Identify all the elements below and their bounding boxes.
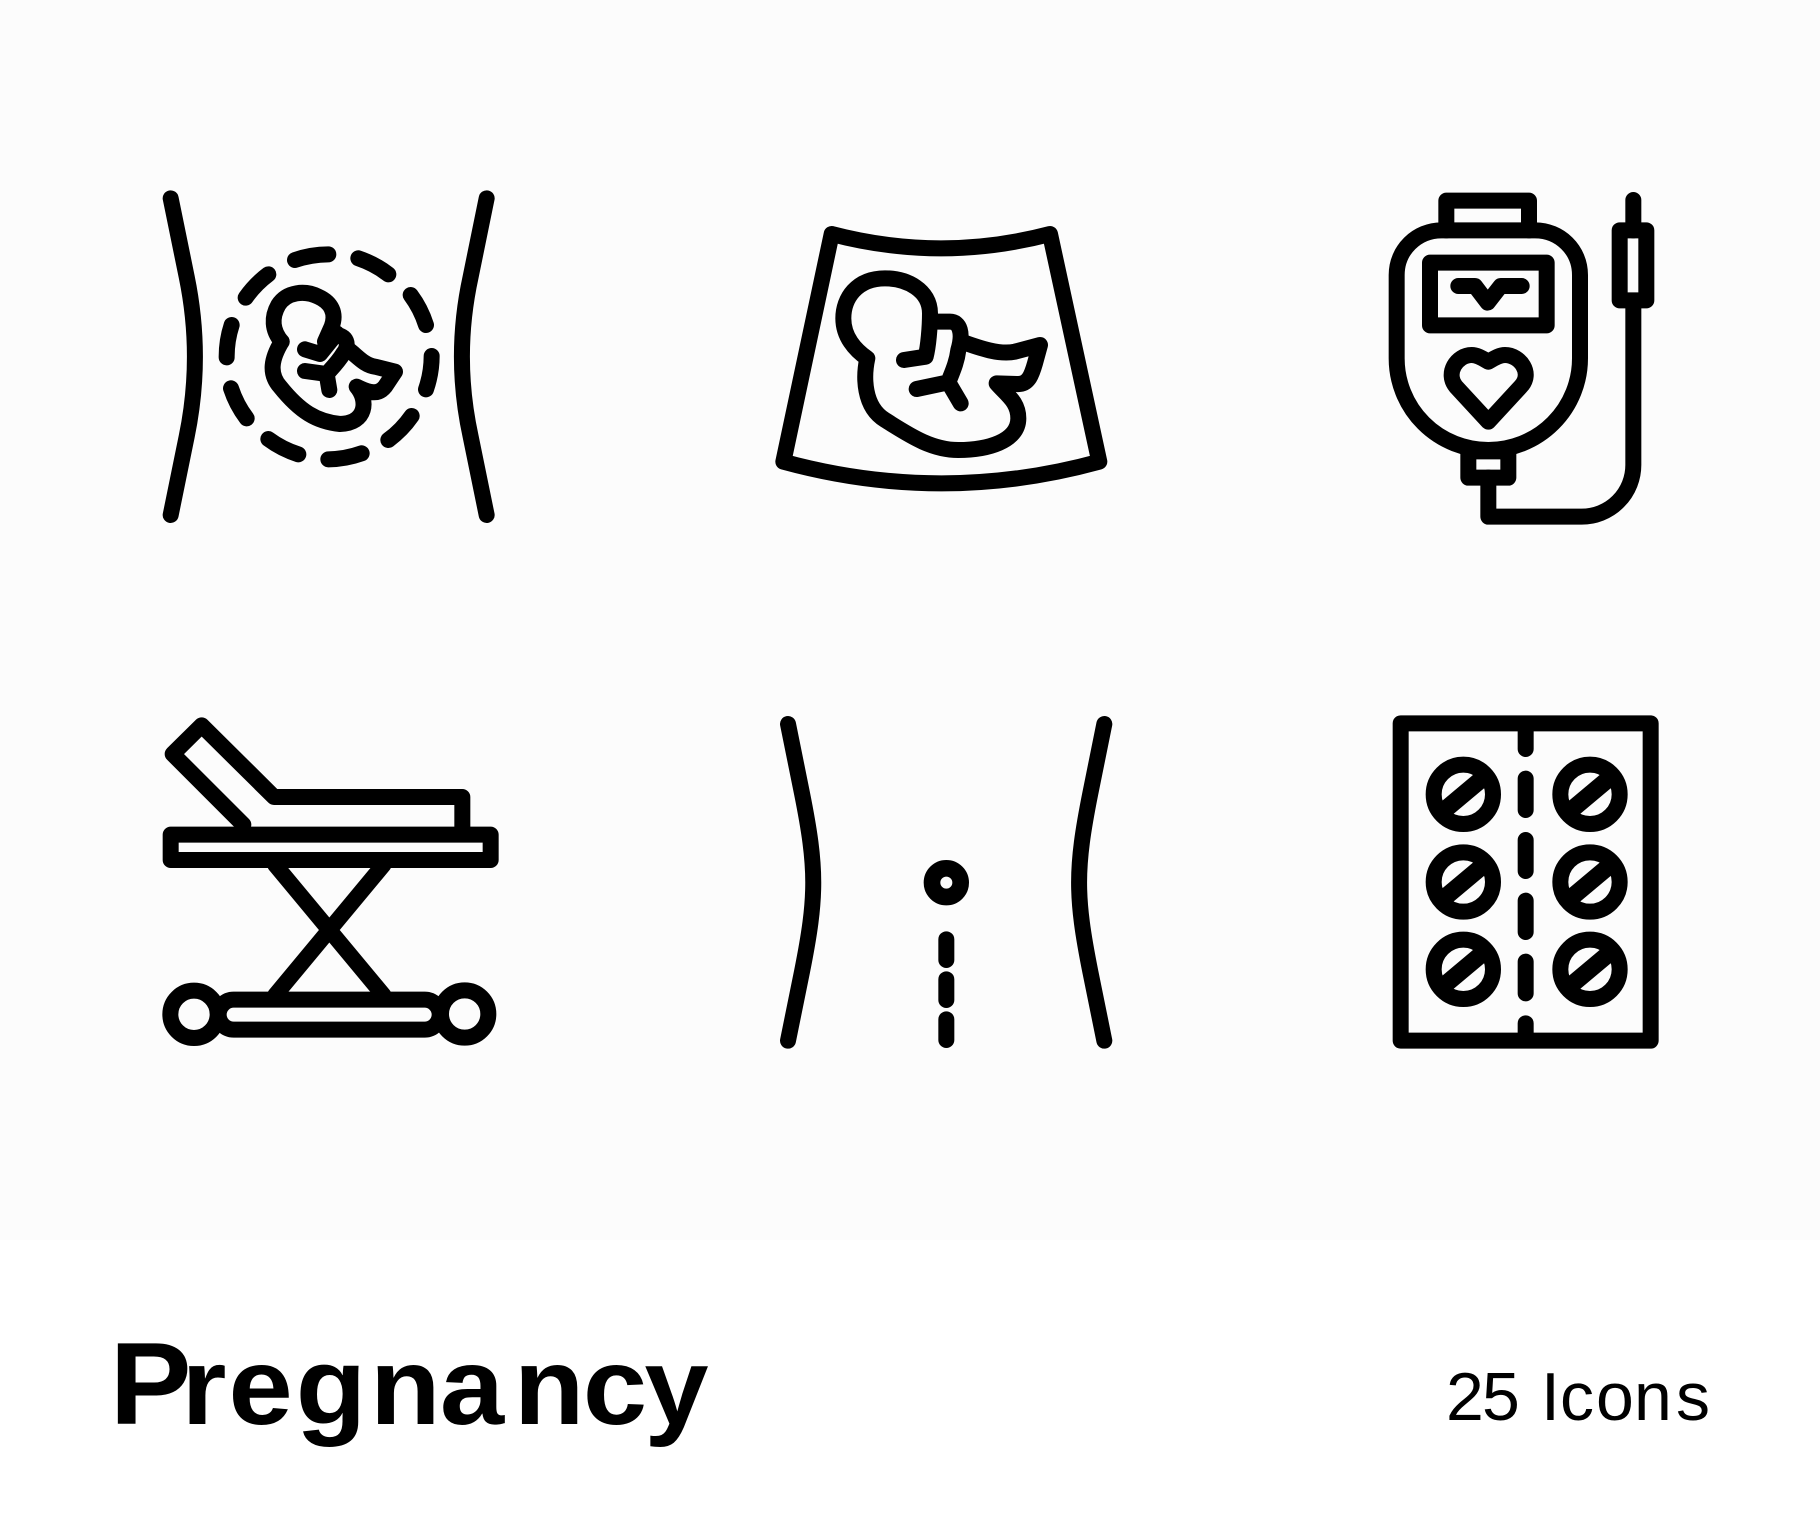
icon: fetus in womb with belly outline [171, 198, 487, 515]
icon: hospital stretcher bed [170, 725, 491, 1038]
icon: ultrasound scan of fetus [783, 234, 1099, 483]
title: Pregnancy [110, 1319, 709, 1449]
icon: blister pack of pills [1401, 723, 1651, 1041]
icon count label: 25 Icons [1446, 1359, 1710, 1435]
icon: fetal heart monitor doppler [1397, 200, 1646, 517]
icon: belly with navel and linea [788, 724, 1104, 1041]
